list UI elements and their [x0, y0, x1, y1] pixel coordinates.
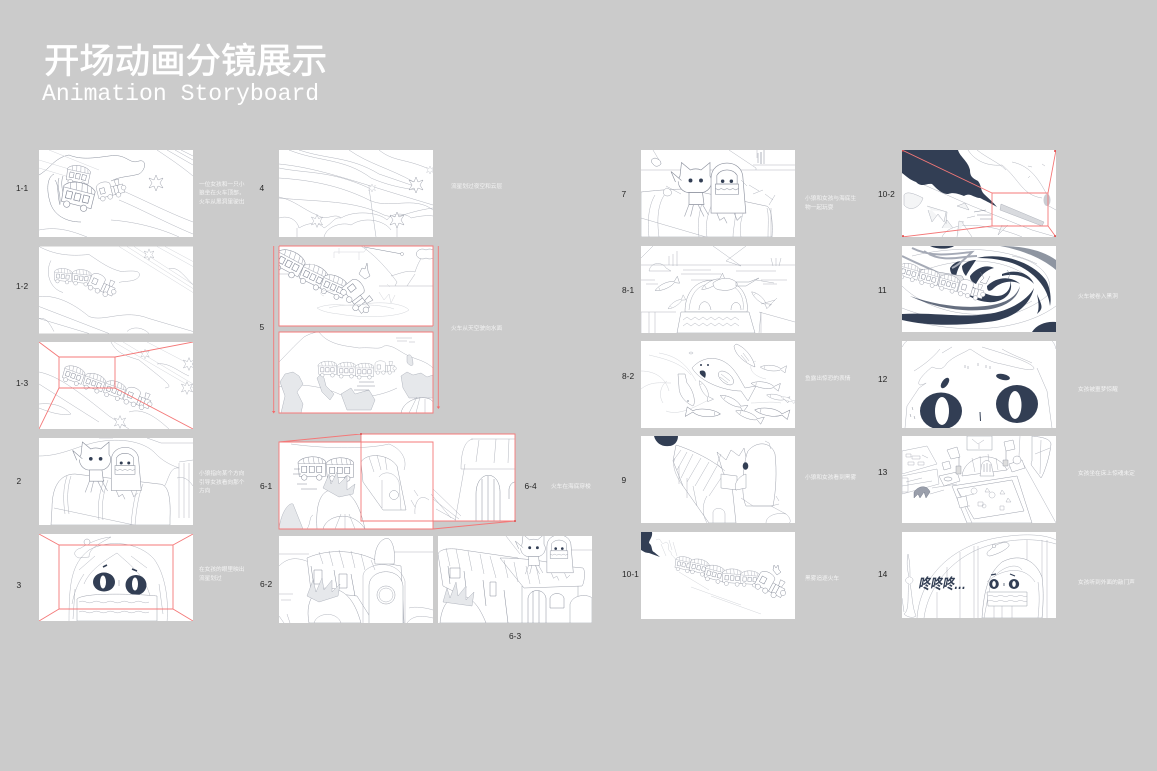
caption: 12: 女孩被噩梦惊醒 [1078, 385, 1118, 393]
panel: storyboard 7 [622, 150, 795, 237]
caption: 2: 方向 [199, 487, 211, 495]
panel: storyboard 12: 12 [878, 374, 888, 384]
panel: storyboard 14: 14 [878, 569, 888, 579]
caption: 7: 物一起玩耍 [805, 203, 834, 211]
panel: storyboard 6-4 [361, 434, 537, 521]
panel: storyboard 6-1 [260, 433, 516, 529]
panel: storyboard 9 [622, 436, 795, 523]
panel: storyboard 5 [260, 246, 440, 414]
panel: storyboard 3 [16, 534, 193, 622]
caption: 2: 小狼指向某个方向 [199, 469, 245, 477]
panel: storyboard 9: 9 [622, 475, 626, 485]
panel: storyboard 8-2 [622, 341, 796, 428]
panel: storyboard 1-3 [16, 342, 195, 429]
panel: storyboard 1-1 [16, 150, 193, 237]
panel: storyboard 13 [878, 436, 1056, 523]
panel: storyboard 7: 7 [622, 189, 626, 199]
caption: 7: 小狼和女孩与海底生 [805, 194, 856, 202]
caption: 10-1: 黑雾追逐火车 [805, 574, 839, 582]
caption: 1-1: 一位女孩和一只小 [199, 180, 245, 188]
caption: 4: 流星划过夜空和云层 [451, 182, 502, 190]
panel: storyboard 6-3 [438, 534, 592, 641]
panel: storyboard 1-3: 1-3 [16, 378, 28, 388]
frame: 5 seabed [280, 332, 432, 412]
frame: 5 sky [280, 246, 432, 326]
panel: storyboard 14 [878, 532, 1056, 618]
caption: 14: 女孩听到外面的敲门声 [1078, 578, 1135, 586]
panel: storyboard 2: 2 [16, 476, 22, 486]
caption: 3: 在女孩的眼里映出 [199, 565, 245, 573]
panel: storyboard 6-2: 6-2 [260, 579, 272, 589]
title [42, 33, 327, 107]
caption: 13: 女孩坐在床上惊魂未定 [1078, 469, 1135, 477]
panel: storyboard 5: 5 [260, 322, 264, 332]
panel: storyboard 8-1: 8-1 [622, 285, 634, 295]
caption: 9: 小狼和女孩看到黑雾 [805, 473, 856, 481]
panel: storyboard 6-1: 6-1 [260, 481, 272, 491]
title: Animation Storyboard [42, 81, 319, 107]
panel: storyboard 10-2: 10-2 [878, 189, 895, 199]
panel: storyboard 4: 4 [260, 183, 264, 193]
caption: 8-2: 鱼露出惊恐的表情 [805, 374, 851, 382]
panel: storyboard 11: 11 [878, 285, 887, 295]
sound effect text: 咚咚咚… [918, 576, 966, 592]
panel: storyboard 3: 3 [16, 580, 22, 590]
panel: storyboard 2 [16, 438, 193, 525]
panel: storyboard 1-2: 1-2 [16, 281, 28, 291]
panel: storyboard 6-3: 6-3 [509, 631, 521, 641]
caption: 11: 火车被卷入黑洞 [1078, 292, 1118, 300]
panel: storyboard 6-2 [260, 536, 433, 623]
panel: storyboard 13: 13 [878, 467, 888, 477]
title: 开场动画分镜展示 [44, 33, 327, 84]
panel: storyboard 11 [878, 246, 1056, 332]
caption: 3: 流星划过 [199, 574, 222, 582]
panel: storyboard 1-1: 1-1 [16, 183, 28, 193]
caption: 1-1: 火车从黑洞里驶出 [199, 197, 245, 205]
panel: storyboard 8-1 [622, 246, 795, 333]
panel: storyboard 10-1: 10-1 [622, 569, 639, 579]
panel: storyboard 12 [878, 341, 1056, 430]
panel: storyboard 1-2 [16, 246, 193, 334]
caption: 6: 火车在海底穿梭 [551, 482, 591, 490]
panel: storyboard 10-2 [878, 150, 1056, 237]
caption: 1-1: 狼坐在火车顶部， [199, 189, 244, 197]
panel: storyboard 8-2: 8-2 [622, 371, 634, 381]
caption: 2: 引导女孩看向那个 [199, 478, 245, 486]
panel: storyboard 10-1 [622, 532, 795, 619]
panel: storyboard 4 [260, 150, 434, 237]
panel: storyboard 6-4: 6-4 [524, 481, 537, 491]
caption: 5: 火车从天空驶向水面 [451, 324, 502, 332]
